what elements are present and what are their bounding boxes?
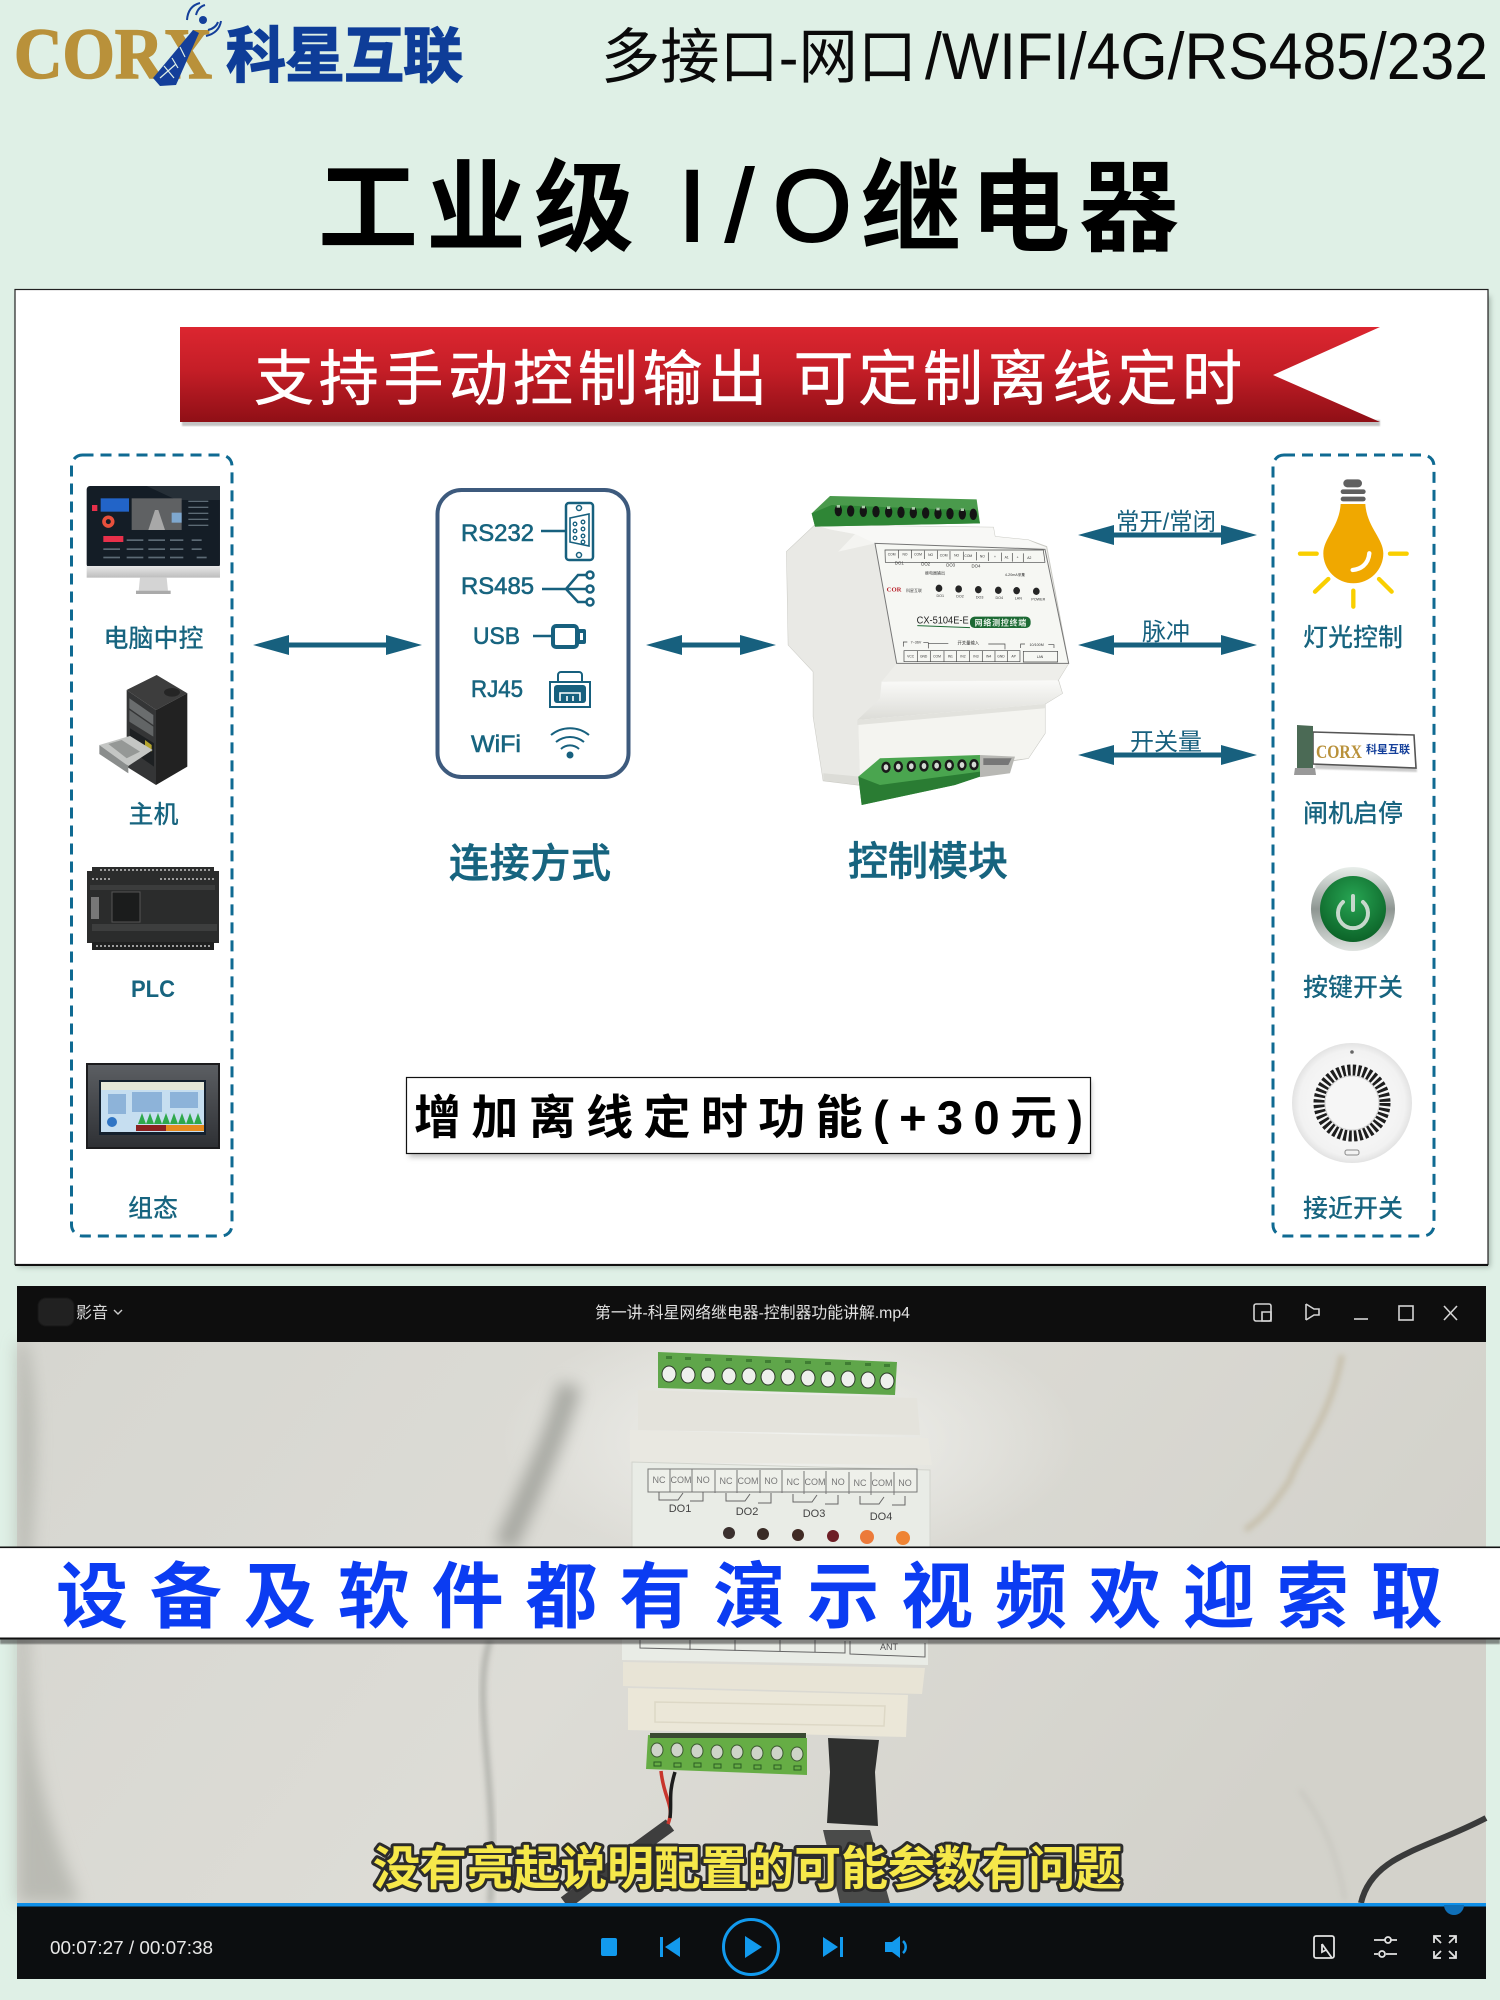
module front label: CX-5104E-E: [917, 615, 969, 626]
module front label: 7~36V: [911, 641, 922, 645]
module front label: IN1: [948, 655, 953, 659]
module front label: 科星互联: [906, 587, 922, 593]
module front label: DO2: [956, 595, 964, 599]
main title: 继电器: [861, 153, 1188, 265]
icon: HMI touch panel: [87, 1064, 219, 1148]
arrow: 开关量 output: 开关量: [1130, 729, 1202, 756]
arrow: 脉冲 output: [1078, 619, 1257, 655]
panel: upper computers dashed box: [72, 455, 232, 1236]
player title bar: 第一讲-科星网络继电器-控制器功能讲解.mp4: [595, 1303, 910, 1322]
module front label: DO4: [996, 596, 1003, 600]
banner ribbon: 支持手动控制输出 可定制离线定时: [254, 346, 1242, 413]
label: 电脑中控: 电脑中控: [103, 625, 204, 653]
video frame: marble wall photo: [17, 1310, 1486, 1903]
arrow: 脉冲 output: 脉冲: [1142, 619, 1190, 646]
photo: terminal labels: NO: [764, 1476, 778, 1486]
label: 灯光控制: 灯光控制: [1303, 624, 1403, 652]
photo: terminal labels: NC: [652, 1475, 666, 1485]
connection WiFi: [471, 728, 589, 758]
arrow: 开关量 output: [1078, 729, 1257, 765]
module front label: DO4: [972, 563, 981, 568]
connection RJ45: RJ45: [471, 676, 523, 703]
icon: server rack: [99, 675, 187, 785]
top interface heading: 多接口-网口: [601, 24, 917, 91]
photo: terminal labels: NO: [696, 1475, 710, 1485]
icon: light bulb: [1300, 479, 1407, 607]
icon: proximity sensor: [1292, 1043, 1412, 1163]
module front label: VCC: [907, 655, 915, 659]
icon: gate sign: 科星互联: [1366, 742, 1410, 756]
photo: wires and antenna cable: [565, 1738, 1486, 1903]
module front label: [875, 543, 1069, 663]
module front label: NO: [928, 553, 934, 557]
photo: terminal labels: [648, 1469, 917, 1545]
player control bar: [17, 1903, 1486, 1979]
logo: CORX 科星互联: 科星互联: [226, 23, 463, 90]
module front label: DO1: [895, 561, 904, 566]
module front label: LAN: [1015, 597, 1022, 601]
icon: gate sign: CORX: [1316, 742, 1362, 763]
label: 按键开关: 按键开关: [1303, 974, 1403, 1002]
photo: terminal labels: COM: [670, 1475, 692, 1485]
connection RS485: [461, 572, 594, 606]
module front label: 网络测控终端: [975, 617, 1026, 627]
module front label: GND: [920, 655, 928, 659]
heading: 连接方式: 连接方式: [449, 842, 611, 886]
module front label: DO3: [946, 562, 956, 567]
module front label: COM: [914, 553, 922, 557]
module front label: IN4: [986, 655, 991, 659]
arrow: 常开/常闭 output: [1078, 509, 1257, 545]
player title bar: 影音: [76, 1304, 108, 1322]
connection USB: USB: [473, 623, 520, 650]
module front label: LAN: [1037, 655, 1044, 659]
arrow: connections to module: [646, 635, 776, 655]
photo: lower green terminal: [646, 1733, 807, 1775]
panel: connection diagram: [15, 290, 1490, 1267]
module front label: COM: [940, 553, 948, 557]
photo: terminal labels: NO: [898, 1478, 912, 1488]
player tool icons: [1314, 1936, 1456, 1958]
logo: CORX 科星互联: CORX: [14, 14, 212, 94]
module front label: NO: [902, 553, 908, 557]
player title bar: [17, 1286, 1486, 1342]
module front label: POWER: [1031, 597, 1046, 601]
playback buttons: [601, 1920, 906, 1974]
photo: terminal labels: DO1: [669, 1503, 691, 1515]
callout: offline timer add-on price: 增加离线定时功能(+30元): [414, 1091, 1083, 1144]
module front label: 4-20mA采集: [1005, 572, 1025, 577]
panel: controlled devices dashed box: [1273, 455, 1434, 1236]
icon: gate sign: [1294, 725, 1417, 775]
module front label: 10/100M: [1030, 643, 1044, 647]
icon: desktop monitor: [87, 486, 220, 594]
module front label: A2: [1027, 556, 1031, 560]
connection WiFi: WiFi: [471, 731, 521, 758]
label: 闸机启停: 闸机启停: [1303, 800, 1403, 828]
connection RS232: [461, 503, 593, 560]
label: 接近开关: 接近开关: [1303, 1195, 1403, 1223]
connection USB: [473, 623, 586, 650]
photo: module body lower: ANT: [880, 1642, 899, 1652]
module front label: DO2: [921, 562, 931, 567]
panel: video player screenshot: [17, 1286, 1486, 1979]
panel: connection methods: [438, 490, 628, 777]
video subtitle: 没有亮起说明配置的可能参数有问题: [373, 1842, 1122, 1895]
main title: 工业级: [318, 153, 642, 265]
module front label: COR: [887, 587, 902, 594]
photo: terminal labels: NO: [831, 1477, 845, 1487]
module front label: 继电器输出: [925, 569, 945, 575]
control module product: [787, 496, 1069, 805]
photo: terminal labels: COM: [738, 1476, 758, 1486]
module front label: A1: [1005, 555, 1009, 559]
module front label: +: [994, 555, 996, 559]
photo: terminal labels: DO3: [803, 1508, 825, 1520]
module front label: COM: [888, 553, 896, 557]
callout: offline timer add-on price: [406, 1078, 1091, 1157]
heading: 控制模块: 控制模块: [848, 840, 1008, 884]
photo: module body upper: [630, 1352, 932, 1560]
banner ribbon: [180, 327, 1380, 426]
module front label: GND: [997, 655, 1005, 659]
photo: module body lower: [622, 1630, 928, 1737]
logo: CORX 科星互联: [14, 3, 463, 94]
photo: terminal labels: NC: [786, 1477, 800, 1487]
photo: terminal labels: DO4: [870, 1511, 892, 1523]
module front label: NO: [954, 554, 960, 558]
photo: terminal labels: DO2: [736, 1506, 758, 1518]
module front label: AP: [1011, 655, 1017, 659]
module front label: +: [1017, 556, 1019, 560]
photo: terminal labels: NC: [854, 1478, 867, 1488]
label: 组态: 组态: [128, 1195, 178, 1223]
label: 主机: 主机: [128, 801, 179, 829]
label: PLC: PLC: [131, 976, 175, 1003]
connection RS232: RS232: [461, 520, 534, 547]
photo: terminal labels: COM: [804, 1477, 826, 1487]
banner: demo videos available: 设备及软件都有演示视频欢迎索取: [56, 1558, 1465, 1638]
player control bar: 00:07:27 / 00:07:38: [50, 1938, 213, 1958]
connection RJ45: [471, 672, 590, 707]
module front label: IN3: [973, 655, 979, 659]
arrow: 常开/常闭 output: 常开/常闭: [1116, 509, 1216, 536]
module bottom terminal: [858, 755, 1015, 805]
arrow: computers to connections: [253, 635, 422, 655]
main title: I/O: [678, 149, 852, 263]
module top terminal: [812, 496, 980, 527]
icon: power button: [1311, 867, 1395, 951]
module front label: NO: [980, 554, 985, 558]
photo: upper green terminal: [658, 1352, 897, 1395]
module front label: DO1: [937, 594, 944, 598]
icon: PLC controller: [87, 867, 219, 950]
module front label: COM: [964, 554, 972, 558]
module front label: 开关量输入: [957, 640, 980, 647]
module front label: IN2: [960, 655, 966, 659]
connection RS485: RS485: [461, 573, 534, 600]
module front label: DO3: [976, 595, 983, 599]
module front label: COM: [933, 655, 941, 659]
top interface heading: [601, 19, 1488, 93]
main title: [318, 149, 1188, 265]
photo: terminal labels: COM: [872, 1478, 892, 1488]
photo: terminal labels: NC: [720, 1476, 733, 1486]
